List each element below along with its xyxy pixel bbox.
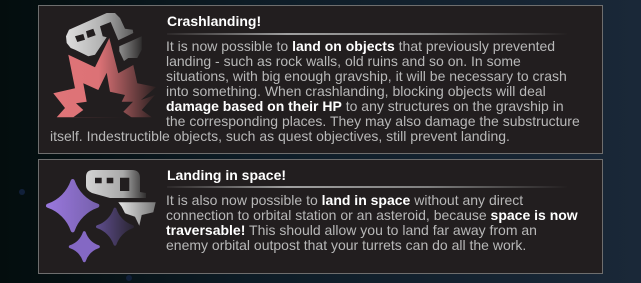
text block: crashlanding body: It is now possible to land on objects that previously prevented: [166, 38, 555, 54]
icon: ship and sparkles: [46, 170, 156, 262]
heading: crashlanding: Crashlanding!: [167, 13, 261, 29]
panel: landing in space: [38, 159, 603, 274]
heading: landing in space: Landing in space!: [167, 167, 286, 183]
text block: crashlanding body: the corresponding places. They may also damage the substructure: [166, 113, 580, 129]
text block: crashlanding body: damage based on their HP to any structures on the gravship in: [166, 98, 564, 114]
text block: landing in space body: enemy orbital outpost that your turrets can do all the work.: [166, 237, 526, 253]
icon: crashing ship: [53, 13, 156, 118]
text block: crashlanding body: itself. Indestructible objects, such as quest objectives, still prevent landing.: [50, 128, 510, 144]
text block: landing in space body: It is also now possible to land in space without any direct: [166, 192, 523, 208]
text block: landing in space body: [166, 192, 578, 253]
text block: landing in space body: connection to orbital station or an asteroid, because space is now: [166, 207, 578, 223]
panel: crashlanding: [38, 5, 603, 154]
text block: landing in space body: traversable! This should allow you to land far away from an: [166, 222, 537, 238]
text block: crashlanding body: into something. When crashlanding, blocking objects will deal: [166, 83, 546, 99]
text block: crashlanding body: situations, with big enough gravship, it will be necessary to crash: [166, 68, 567, 84]
text block: crashlanding body: [50, 38, 580, 144]
text block: crashlanding body: landing - such as rock walls, old ruins and so on. In some: [166, 53, 521, 69]
